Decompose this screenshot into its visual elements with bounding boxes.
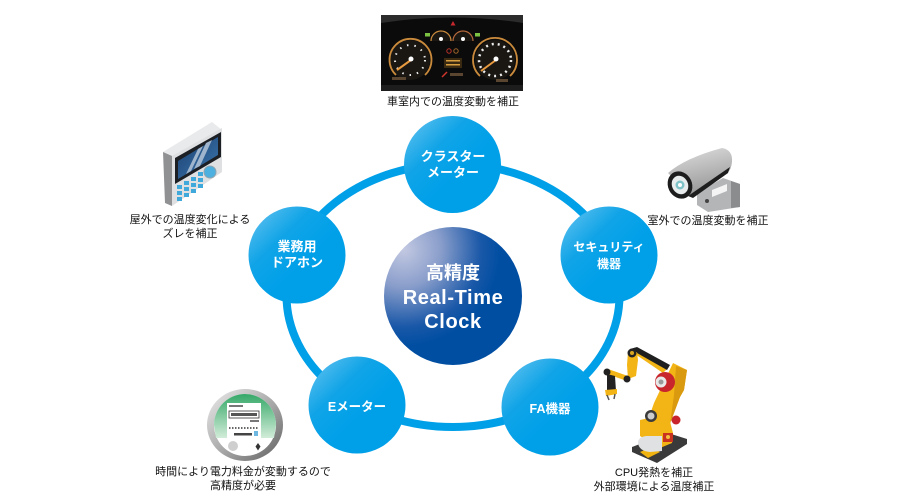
caption: E meter: [155, 464, 331, 492]
caption: FA equipment: 外部環境による温度補正: [594, 480, 714, 493]
node: business door phone: 業務用: [277, 239, 317, 254]
icon: industrial robot arm: [604, 347, 687, 463]
icon: smart electric meter: [207, 389, 283, 461]
node: cluster meter: メーター: [427, 165, 479, 180]
center circle: Real-Time Clock: Clock: [424, 311, 482, 333]
node: security equipment: セキュリティ: [573, 240, 645, 254]
center circle: Real-Time Clock: [384, 227, 522, 365]
caption: E meter: 高精度が必要: [210, 478, 276, 492]
node: FA equipment: FA機器: [530, 401, 571, 416]
ring connecting the application nodes: [286, 164, 620, 427]
caption: cluster meter: 車室内での温度変動を補正: [387, 94, 519, 108]
icon: door phone: [163, 122, 222, 206]
caption: E meter: 時間により電力料金が変動するので: [155, 464, 331, 478]
node: E meter: Eメーター: [328, 400, 386, 414]
caption: door phone: [130, 213, 250, 240]
center circle: Real-Time Clock: 高精度: [426, 263, 480, 283]
node: business door phone: [248, 206, 346, 304]
caption: FA equipment: [594, 465, 714, 493]
node: cluster meter: [404, 116, 501, 213]
node: security equipment: 機器: [597, 256, 621, 271]
icon: security camera: [663, 148, 740, 212]
caption: door phone: ズレを補正: [162, 226, 218, 240]
node: FA equipment: [502, 358, 598, 456]
caption: security camera: 室外での温度変動を補正: [648, 213, 768, 227]
node: business door phone: ドアホン: [271, 255, 323, 270]
node: security equipment: [560, 206, 658, 304]
node: cluster meter: クラスター: [421, 149, 485, 164]
node: E meter: [308, 356, 406, 454]
center circle: Real-Time Clock: Real-Time: [403, 287, 503, 309]
icon: instrument cluster: [381, 15, 523, 91]
caption: door phone: 屋外での温度変化による: [130, 213, 250, 226]
caption: FA equipment: CPU発熱を補正: [615, 465, 693, 479]
